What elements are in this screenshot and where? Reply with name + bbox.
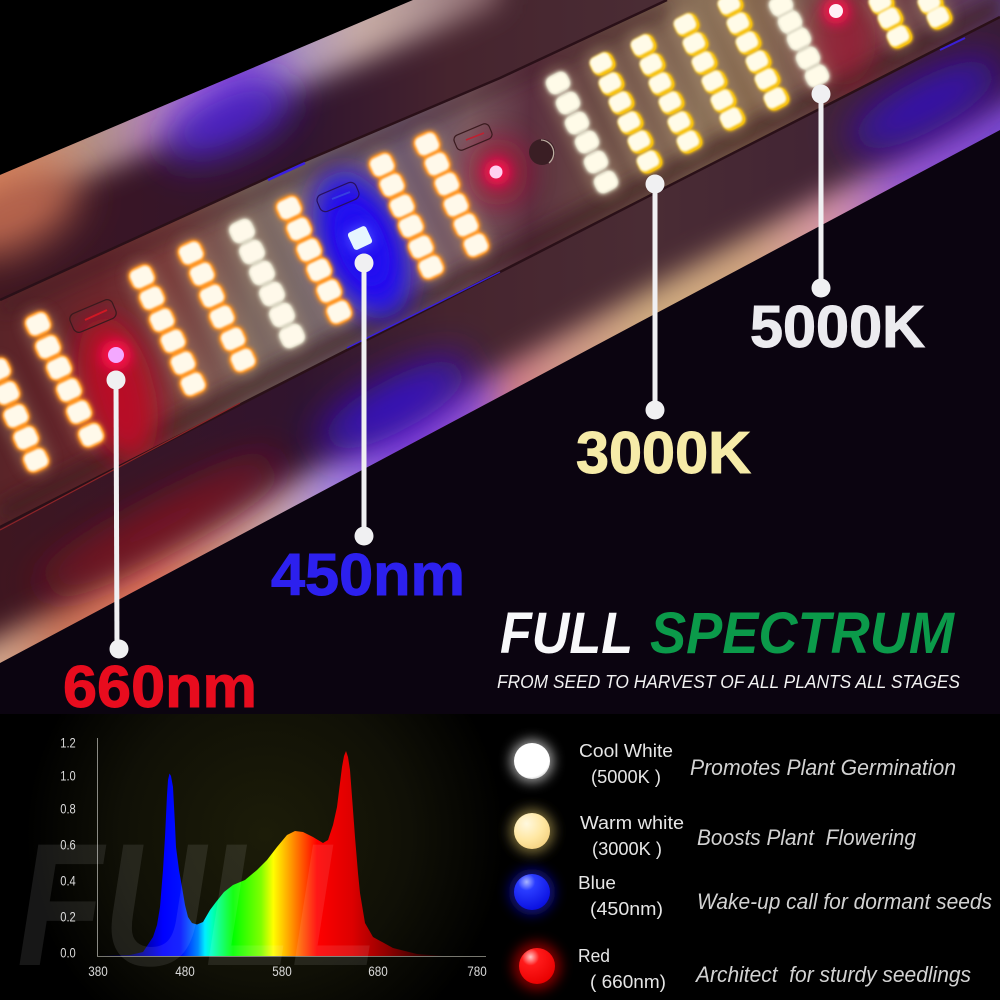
socket left <box>68 298 118 334</box>
cool white LED columns <box>228 0 830 349</box>
red glow center <box>468 138 528 206</box>
y axis labels: 1.0 <box>60 768 76 784</box>
socket blue <box>315 181 361 213</box>
lower dark line <box>0 17 1000 527</box>
y axis labels <box>60 736 76 960</box>
callout: 5000K <box>750 84 925 360</box>
warm LED columns left <box>0 131 490 473</box>
structural lines <box>0 0 1000 530</box>
blue line reflection right <box>940 38 965 50</box>
connector sockets <box>68 122 494 334</box>
legend: red <box>513 942 971 992</box>
y axis labels: 0.6 <box>60 838 76 852</box>
leader line 450nm <box>354 254 374 546</box>
bottom lit lip <box>0 80 1000 663</box>
benefit: seedlings: Architect for sturdy seedlings <box>694 962 971 987</box>
value: 450nm: (450nm) <box>590 899 663 919</box>
y axis labels: 0.4 <box>60 874 76 888</box>
name: blue: Blue <box>578 873 616 893</box>
y axis labels: 0.8 <box>60 802 76 816</box>
chart glow <box>20 714 510 1000</box>
value: 5000K: (5000K ) <box>591 767 661 787</box>
x axis labels: 580 <box>272 964 292 979</box>
red diode right <box>823 0 849 24</box>
icon: warm white sphere <box>510 809 554 853</box>
x axis labels: 680 <box>368 964 388 979</box>
x axis labels: 480 <box>175 964 195 979</box>
LED light bar <box>0 0 1000 663</box>
callout: 660nm <box>63 370 257 720</box>
tan column halos <box>0 2 938 460</box>
lower right background <box>0 130 1000 714</box>
blue line reflection upper <box>268 163 305 180</box>
icon: red sphere <box>513 942 561 990</box>
red diode center <box>484 159 510 185</box>
blue wash on lower lip <box>308 342 482 468</box>
red wash on lower lip <box>28 443 292 607</box>
screw ring <box>529 139 555 165</box>
blue diode <box>344 223 376 253</box>
icon: blue sphere <box>509 869 555 915</box>
name: warm white: Warm white <box>580 813 684 833</box>
dark shading near lower edge <box>0 0 1000 527</box>
LED columns <box>0 0 951 473</box>
legend: warm white <box>510 809 917 859</box>
spectrum chart <box>17 714 510 1000</box>
name: cool white: Cool White <box>579 741 673 761</box>
bottom panel <box>0 714 1000 1000</box>
red glow right <box>808 0 876 86</box>
name: red: Red <box>578 946 610 966</box>
leader line 660nm <box>106 370 128 658</box>
individual diodes <box>68 0 849 370</box>
socket center <box>452 122 494 152</box>
y axis labels: 1.2 <box>60 736 76 750</box>
x axis labels <box>88 964 487 979</box>
board surface lighting <box>0 0 1000 527</box>
dark shading near upper edge <box>0 0 667 318</box>
value: 3000K: (3000K ) <box>592 839 662 859</box>
label 660nm: 660nm <box>63 654 257 720</box>
label 5000K: 5000K <box>750 294 925 360</box>
title word SPECTRUM: SPECTRUM <box>650 601 956 666</box>
blue wash on top lip <box>153 65 303 175</box>
benefit: germination: Promotes Plant Germination <box>690 755 956 780</box>
x axis labels: 380 <box>88 964 108 979</box>
blue glow on board <box>294 157 430 333</box>
x axis labels: 780 <box>467 964 487 979</box>
title <box>500 601 956 666</box>
spectrum curve <box>100 751 443 956</box>
blue core glow <box>332 208 392 282</box>
bar base <box>0 0 1000 670</box>
photo background <box>0 0 1000 714</box>
subtitle: FROM SEED TO HARVEST OF ALL PLANTS ALL STAGES <box>497 672 960 692</box>
title word FULL: FULL <box>500 601 633 666</box>
warm yellow LED columns right <box>588 0 951 173</box>
red glow left <box>64 308 172 472</box>
blue line reflection lower <box>347 272 500 348</box>
legend: cool white <box>511 740 956 787</box>
leader line 3000K <box>646 174 664 420</box>
label 450nm: 450nm <box>271 542 465 608</box>
icon: cool white sphere <box>511 740 553 782</box>
purple wash on lower lip right <box>838 42 1000 168</box>
LED board surface <box>0 0 1000 527</box>
red diode left <box>101 340 131 370</box>
lower red groove line <box>0 403 240 530</box>
y axis labels: 0.0 <box>60 946 76 960</box>
y axis labels: 0.2 <box>60 910 76 924</box>
watermark FULL: FULL <box>17 808 378 1000</box>
salmon wash top left <box>0 155 90 275</box>
callout: 3000K <box>576 174 751 486</box>
y axis <box>96 738 98 956</box>
benefit: flowering: Boosts Plant Flowering <box>697 825 917 850</box>
panel background <box>0 714 1000 1000</box>
callout: 450nm <box>271 254 465 608</box>
x axis <box>97 956 486 958</box>
top lit lip <box>0 0 512 214</box>
legend: blue <box>509 869 992 919</box>
upper dark line <box>0 0 667 300</box>
benefit: dormant seeds: Wake-up call for dormant seeds <box>697 889 992 914</box>
leader line 5000K <box>812 84 830 298</box>
label 3000K: 3000K <box>576 420 751 486</box>
value: 660nm: ( 660nm) <box>590 972 666 992</box>
